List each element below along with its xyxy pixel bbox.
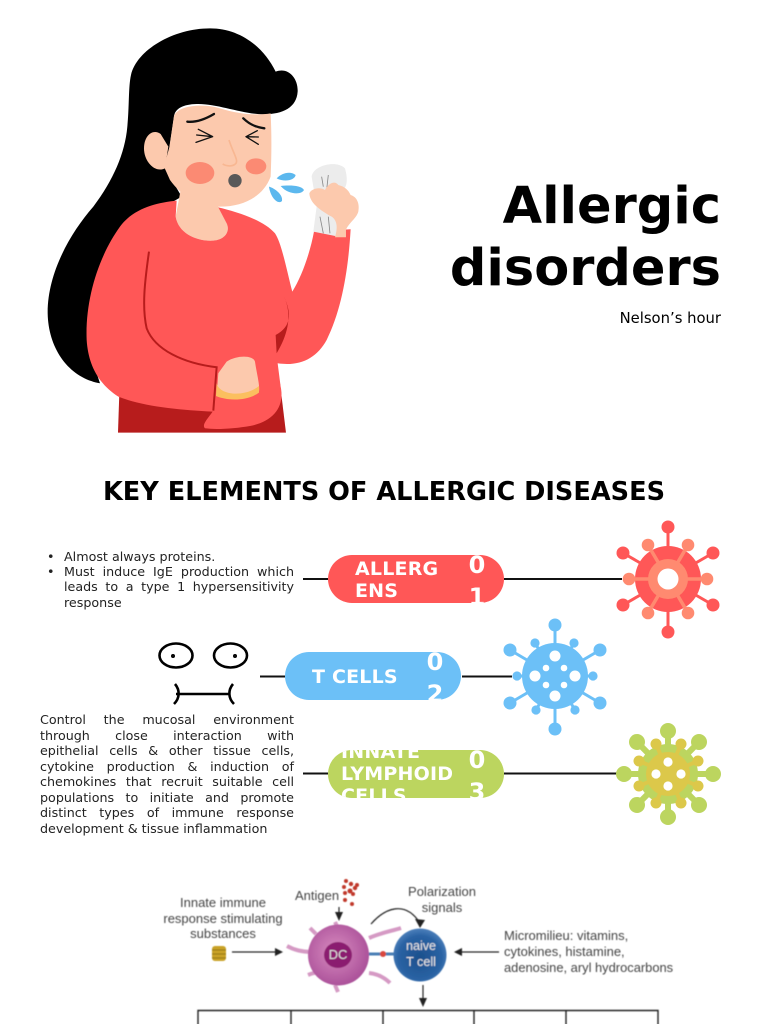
neck bbox=[176, 190, 228, 241]
diagram labels: substances bbox=[190, 926, 256, 941]
diagram: T cell polarization: T cell bbox=[406, 955, 436, 969]
output table bbox=[198, 1010, 658, 1024]
substance coil bbox=[212, 946, 226, 961]
raised hand bbox=[309, 183, 359, 237]
cheeks bbox=[186, 162, 214, 184]
text block: T cells description: chemokines that recruit suitable cell bbox=[40, 774, 294, 789]
text block: allergens description: Almost always proteins. bbox=[64, 548, 215, 564]
section heading: KEY ELEMENTS OF ALLERGIC DISEASES bbox=[103, 477, 665, 507]
text block: T cells description: epithelial cells & other tissue cells, bbox=[40, 743, 294, 758]
text block: allergens description: leads to a type 1 hypersensitivity bbox=[64, 579, 294, 594]
sweater with arm bbox=[87, 201, 351, 429]
diagram labels: Innate immune bbox=[180, 895, 266, 910]
eyebrows bbox=[187, 114, 214, 122]
pill: allergens: ENS bbox=[355, 580, 398, 602]
synapse bbox=[369, 952, 394, 956]
diagram labels: response stimulating bbox=[163, 911, 283, 926]
pill: T cells bbox=[285, 652, 461, 700]
diagram: T cell polarization: Micromilieu: vitamins, bbox=[504, 928, 628, 943]
nose bbox=[223, 140, 237, 166]
subtitle: Nelson’s hour bbox=[620, 310, 721, 327]
illustration: woman sneezing into a tissue bbox=[48, 28, 359, 433]
text block: T cells description: development & tissue inflammation bbox=[40, 820, 267, 836]
mouth bbox=[228, 174, 242, 187]
title bbox=[450, 177, 721, 298]
text block: allergens description: • bbox=[47, 548, 54, 564]
text block: T cells description: populations to initiate and promote bbox=[40, 790, 294, 804]
text block: T cells description: distinct types of immune response bbox=[40, 805, 294, 820]
diagram labels: Polarization bbox=[408, 884, 476, 899]
text block: allergens description: response bbox=[64, 595, 122, 610]
tissue bbox=[312, 164, 347, 237]
pants bbox=[118, 383, 286, 433]
title: disorders bbox=[450, 239, 721, 298]
diagram labels bbox=[163, 884, 476, 941]
dendritic cell bbox=[287, 922, 401, 992]
sweater fold lines bbox=[144, 252, 217, 411]
text block: T cells description: cytokine production & induction of bbox=[40, 758, 294, 774]
diagram: T cell polarization: naive bbox=[406, 939, 436, 953]
text block: T cells description: Control the mucosal environment bbox=[40, 712, 294, 727]
squeezed eyes bbox=[196, 129, 258, 144]
text block: T cells description: through close interaction with bbox=[40, 728, 294, 742]
diagram: T cell polarization: DC bbox=[329, 947, 347, 962]
pill: innate lymphoid cells bbox=[328, 750, 504, 798]
hair bbox=[48, 28, 298, 383]
lower hand bbox=[217, 357, 259, 399]
title: Allergic bbox=[503, 177, 721, 236]
diagram labels: signals bbox=[422, 900, 463, 915]
ear bbox=[144, 132, 168, 169]
text block: allergens description: • bbox=[47, 564, 54, 579]
diagram: T cell polarization: cytokines, histamine, bbox=[504, 944, 625, 959]
naive T cell bbox=[394, 928, 446, 982]
diagram labels: Antigen bbox=[295, 888, 339, 903]
diagram: T cell polarization: adenosine, aryl hydrocarbons bbox=[504, 960, 673, 975]
face bbox=[164, 106, 271, 207]
pill: allergens bbox=[328, 555, 504, 603]
arrows bbox=[232, 907, 499, 1002]
pill: allergens: ALLERG bbox=[355, 558, 438, 580]
pill: T cells: T CELLS bbox=[312, 666, 398, 688]
sneeze droplets bbox=[269, 173, 304, 202]
antigen cluster bbox=[342, 879, 359, 906]
pill: innate lymphoid cells: LYMPHOID bbox=[341, 763, 453, 785]
text block: T cells description bbox=[40, 712, 294, 836]
text block: allergens description: Must induce IgE production which bbox=[64, 564, 294, 579]
text block: allergens description bbox=[47, 548, 294, 610]
